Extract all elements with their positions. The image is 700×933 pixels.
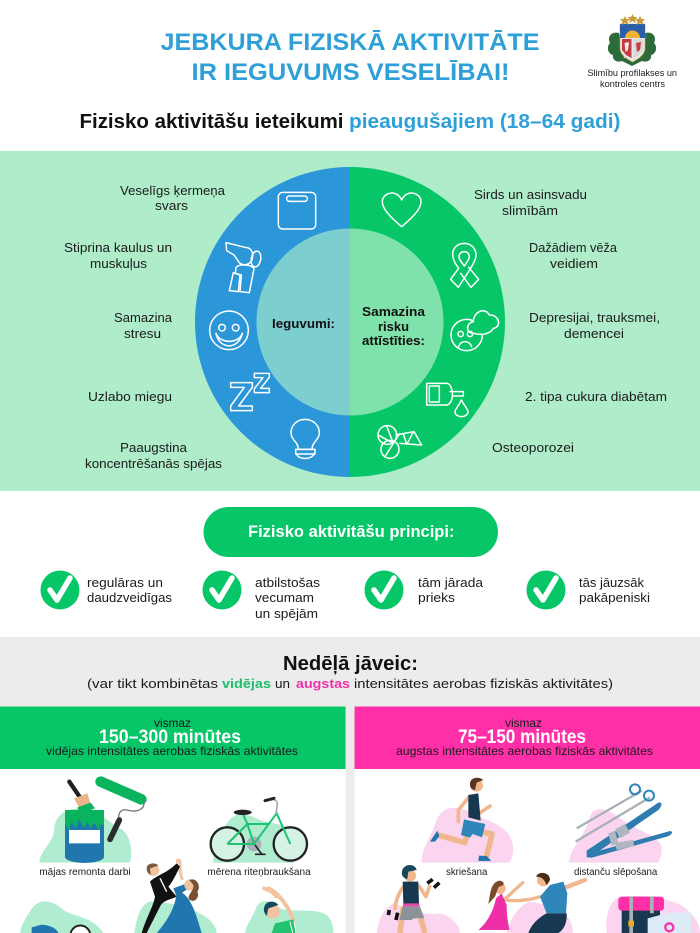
risk labels: Depresijai, trauksmei, bbox=[529, 310, 660, 325]
label: reduces risk of developing bbox=[362, 304, 426, 348]
icon: light bulb bbox=[291, 419, 319, 458]
title bbox=[160, 29, 540, 86]
risk labels: Dažādiem vēža bbox=[529, 240, 618, 255]
panel: benefits and reduced risks bbox=[0, 151, 700, 491]
label: cross-country skiing: distanču slēpošana bbox=[574, 867, 657, 878]
principle 1: daudzveidīgas bbox=[87, 590, 173, 605]
principle 2: un spējām bbox=[255, 606, 318, 621]
icon: scale bbox=[278, 192, 316, 229]
note: combinations of intensities: un bbox=[275, 676, 290, 691]
note: combinations of intensities: augstas bbox=[296, 676, 350, 691]
label: reduces risk of developing: Samazina bbox=[362, 304, 426, 319]
logo: coat of arms and organisation name bbox=[588, 14, 677, 90]
heading: recommendations for adults: Fizisko aktivitāšu ieteikumi bbox=[80, 111, 344, 133]
icon: smiling face bbox=[210, 311, 248, 350]
icons on the donut bbox=[210, 192, 499, 458]
principle 2: atbilstošas bbox=[255, 575, 321, 590]
panel: weekly requirement bbox=[0, 637, 700, 933]
benefit labels: koncentrēšanās spējas bbox=[85, 456, 223, 471]
icon: coat of arms bbox=[608, 14, 656, 66]
heading: recommendations for adults: pieaugušajiem (18–64 gadi) bbox=[349, 111, 620, 133]
note: combinations of intensities bbox=[87, 676, 613, 691]
note: combinations of intensities: intensitātes aerobas fiziskās aktivitātes) bbox=[354, 676, 613, 691]
icon: awareness ribbon bbox=[451, 243, 479, 287]
principle 1: regulāras un bbox=[87, 575, 163, 590]
label: moderate cycling: mērena riteņbraukšana bbox=[207, 867, 311, 878]
benefit labels: Paaugstina bbox=[120, 440, 188, 455]
icon: sleep letters bbox=[231, 373, 269, 411]
heading: recommendations for adults bbox=[80, 111, 620, 133]
organisation name: Slimību profilakses un bbox=[588, 68, 677, 79]
illustration: nordic skiing bbox=[569, 784, 672, 863]
benefit labels: svars bbox=[155, 198, 189, 213]
illustration: running bbox=[422, 778, 513, 863]
header: moderate intensity minutes bbox=[0, 706, 346, 769]
icon: glucose meter and drop bbox=[427, 383, 468, 417]
risk labels: demencei bbox=[564, 326, 624, 341]
illustration: ballroom dancing bbox=[134, 858, 217, 933]
benefit labels: muskuļus bbox=[90, 256, 148, 271]
note: combinations of intensities: (var tikt kombinētas bbox=[87, 676, 219, 691]
benefit labels: stresu bbox=[124, 326, 161, 341]
donut chart: benefits half and risks half bbox=[195, 167, 505, 477]
banner: principles bbox=[204, 507, 498, 557]
header: moderate intensity minutes: vismaz bbox=[154, 716, 191, 730]
benefit labels: Uzlabo miegu bbox=[88, 389, 172, 404]
organisation name: kontroles centrs bbox=[600, 79, 665, 90]
principle 4 bbox=[526, 570, 650, 610]
header: vigorous intensity minutes: 75–150 minūtes bbox=[458, 726, 586, 748]
label: reduces risk of developing: risku bbox=[378, 319, 409, 334]
risk labels bbox=[474, 187, 667, 455]
icon: bones bbox=[378, 426, 422, 458]
header: vigorous intensity minutes: vismaz bbox=[505, 716, 542, 730]
benefit labels: Stiprina kaulus un bbox=[64, 240, 172, 255]
illustration: vacuum cleaner bbox=[20, 901, 103, 933]
risk labels: slimībām bbox=[502, 203, 558, 218]
principle 2: vecumam bbox=[255, 590, 314, 605]
principle 3: prieks bbox=[418, 590, 456, 605]
heading: weekly requirement: Nedēļā jāveic: bbox=[283, 653, 418, 675]
risk labels: veidiem bbox=[550, 256, 598, 271]
illustration: stretching bbox=[245, 888, 333, 933]
icon: heart bbox=[382, 193, 421, 227]
icon: sad face with cloud bbox=[451, 311, 499, 351]
principle 4: tās jāuzsāk bbox=[579, 575, 644, 590]
header: vigorous intensity minutes bbox=[354, 706, 700, 769]
label: running: skriešana bbox=[446, 867, 487, 878]
illustration: weight training bbox=[377, 865, 460, 933]
benefit labels: Samazina bbox=[114, 310, 173, 325]
label: home repair: mājas remonta darbi bbox=[39, 867, 131, 878]
principle 3: tām jārada bbox=[418, 575, 484, 590]
illustration: dancing couple bbox=[478, 873, 585, 933]
organisation name bbox=[588, 68, 677, 90]
benefit labels bbox=[64, 183, 226, 471]
banner: principles: Fizisko aktivitāšu principi: bbox=[248, 523, 454, 541]
label: benefits: Ieguvumi: bbox=[272, 316, 335, 331]
risk labels: 2. tipa cukura diabētam bbox=[525, 389, 667, 404]
risk labels: Sirds un asinsvadu bbox=[474, 187, 587, 202]
panel: moderate intensity bbox=[0, 706, 346, 933]
title: IR IEGUVUMS VESELĪBAI! bbox=[192, 59, 510, 86]
header: moderate intensity minutes: vidējas intensitātes aerobas fiziskās aktivitātes bbox=[46, 744, 298, 758]
header: vigorous intensity minutes: augstas intensitātes aerobas fiziskās aktivitātes bbox=[396, 744, 653, 758]
principle 3 bbox=[364, 570, 484, 610]
panel: vigorous intensity bbox=[354, 706, 700, 933]
title: JEBKURA FIZISKĀ AKTIVITĀTE bbox=[160, 29, 540, 56]
label: reduces risk of developing: attīstīties: bbox=[362, 333, 425, 348]
risk labels: Osteoporozei bbox=[492, 440, 574, 455]
principle 4: pakāpeniski bbox=[579, 590, 650, 605]
illustration: bicycle bbox=[211, 798, 307, 863]
icon: knee joint bbox=[226, 243, 262, 293]
header: moderate intensity minutes: 150–300 minūtes bbox=[99, 726, 241, 748]
illustration: hiking backpack and map bbox=[606, 896, 700, 933]
illustration: home repair bbox=[39, 782, 144, 863]
note: combinations of intensities: vidējas bbox=[222, 676, 271, 691]
principle 1 bbox=[40, 570, 173, 610]
benefit labels: Veselīgs ķermeņa bbox=[120, 183, 226, 198]
principle 2 bbox=[202, 570, 321, 621]
